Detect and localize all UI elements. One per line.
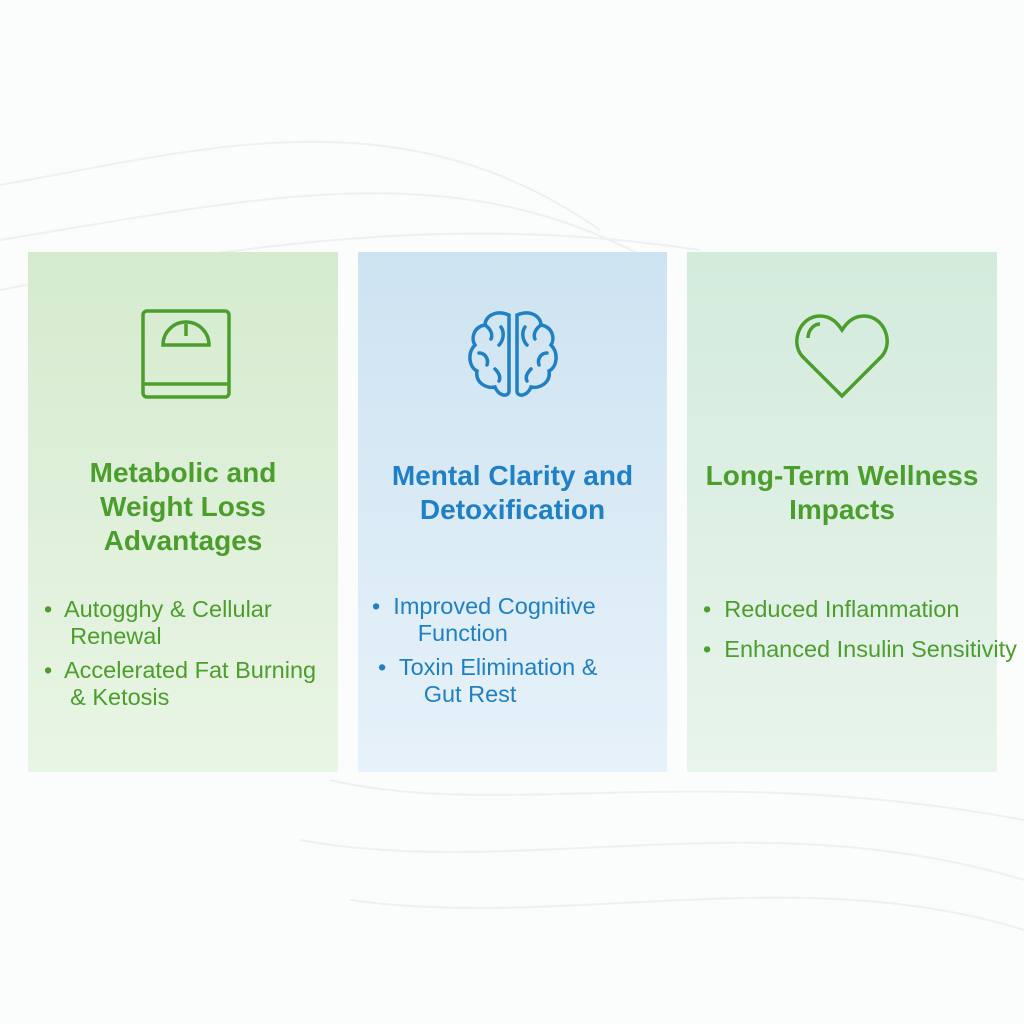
- icon: brain: [468, 311, 558, 397]
- panel: mental: [358, 252, 667, 772]
- heading: Impacts: [789, 494, 895, 525]
- bullets: & Ketosis: [70, 684, 169, 710]
- bullets: • Improved Cognitive: [372, 593, 596, 619]
- icon: scale: [141, 309, 231, 399]
- heading: Detoxification: [420, 494, 605, 525]
- panel: metabolic: [28, 252, 338, 772]
- bullets: • Accelerated Fat Burning: [44, 657, 316, 683]
- heading: Metabolic and: [90, 457, 276, 488]
- heading: [392, 460, 633, 525]
- bullets: Function: [418, 620, 508, 646]
- bullets: • Enhanced Insulin Sensitivity: [703, 636, 1017, 662]
- heading: [706, 460, 978, 525]
- bullets: • Reduced Inflammation: [703, 596, 959, 622]
- bullets: [372, 593, 598, 707]
- bullets: Renewal: [70, 623, 162, 649]
- heading: Long-Term Wellness: [706, 460, 978, 491]
- bullets: • Toxin Elimination &: [378, 654, 597, 680]
- icon: heart: [795, 314, 889, 398]
- bullets: [703, 596, 1017, 662]
- bullets: • Autogghy & Cellular: [44, 596, 272, 622]
- heading: Weight Loss: [100, 491, 266, 522]
- panel: long-term: [687, 252, 997, 772]
- heading: [90, 457, 276, 556]
- heading: Advantages: [104, 525, 262, 556]
- heading: Mental Clarity and: [392, 460, 633, 491]
- bullets: Gut Rest: [424, 681, 516, 707]
- bullets: [44, 596, 316, 710]
